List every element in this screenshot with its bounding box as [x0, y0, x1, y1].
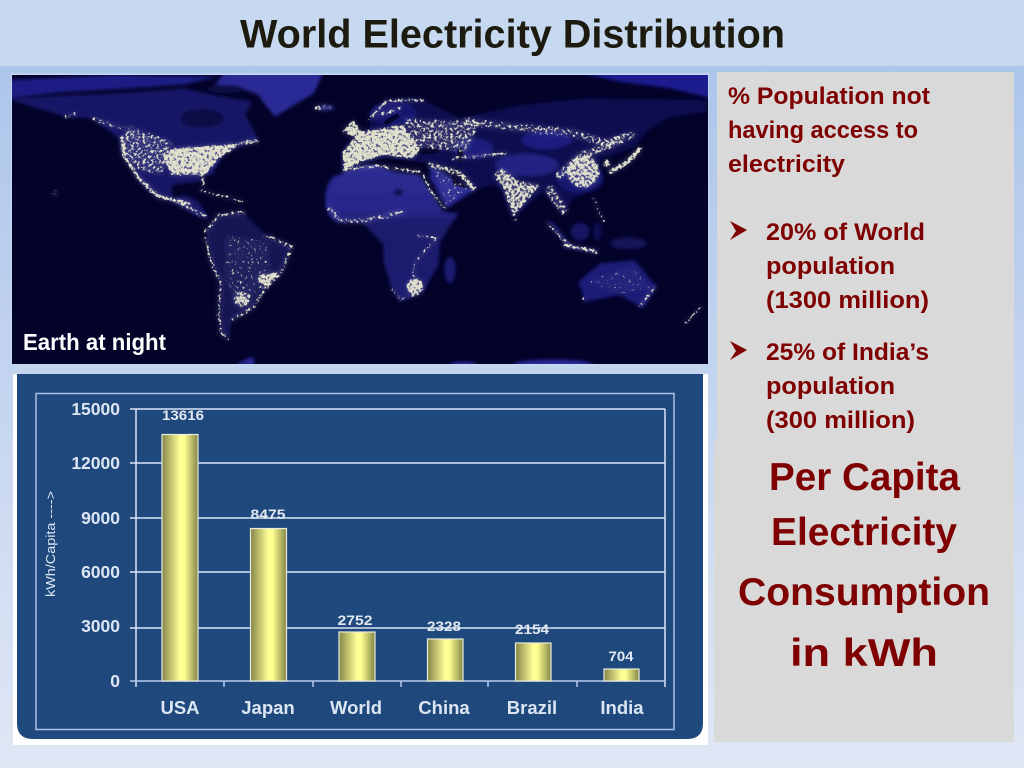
panel: earth at night map	[9, 72, 712, 369]
heading: population without access: having access to	[728, 117, 918, 144]
bullet: India population: (300 million)	[766, 407, 915, 434]
bullet: world population: (1300 million)	[766, 287, 929, 314]
gridlines and axes	[130, 409, 665, 687]
y axis labels	[71, 399, 120, 691]
heading: population without access: % Population not	[728, 83, 930, 110]
value labels: 2752	[338, 613, 372, 628]
bullet: India population: population	[766, 373, 895, 400]
y axis labels: 12000	[71, 453, 120, 473]
category labels: China	[418, 697, 470, 718]
heading: population without access: electricity	[728, 151, 845, 178]
category labels: Japan	[241, 697, 295, 718]
category labels	[160, 697, 644, 718]
category labels: India	[600, 697, 644, 718]
panel: access to electricity text	[717, 72, 1014, 444]
panel: per capita heading: Electricity	[771, 511, 957, 554]
category labels: USA	[160, 697, 200, 718]
y axis labels: 9000	[81, 508, 120, 528]
panel: per capita heading: in kWh	[790, 632, 938, 675]
bullet: world population: population	[766, 253, 895, 280]
map: Europe, Africa, Asia, Australia	[319, 72, 712, 369]
y axis labels: 15000	[71, 399, 120, 419]
bullet: India population: 25% of India’s	[766, 339, 929, 366]
y axis labels: 6000	[81, 562, 120, 582]
value labels: 2154	[515, 622, 550, 637]
heading: population without access	[728, 83, 930, 178]
header band	[0, 0, 1024, 66]
category labels: Brazil	[507, 697, 557, 718]
y axis labels: 0	[110, 671, 120, 691]
bars	[162, 434, 639, 681]
map: inland seas	[363, 113, 475, 190]
panel: per capita heading: Consumption	[738, 571, 990, 614]
value labels: 8475	[250, 507, 286, 522]
bullet: world population: 20% of World	[766, 219, 925, 246]
y axis title: kWh/Capita ---->	[43, 491, 58, 597]
category labels: World	[330, 697, 382, 718]
value labels	[162, 408, 634, 664]
panel: bar chart	[13, 374, 708, 745]
bullet: world population	[730, 219, 929, 314]
value labels: 2328	[427, 619, 462, 634]
panel: per capita heading: Per Capita	[769, 456, 960, 499]
bullet: India population	[730, 339, 929, 434]
map caption: Earth at night	[23, 329, 166, 355]
value labels: 704	[608, 649, 634, 664]
map: Americas	[9, 72, 352, 365]
y axis labels: 3000	[81, 616, 120, 636]
title: World Electricity Distribution	[240, 12, 785, 56]
value labels: 13616	[162, 408, 205, 423]
panel: per capita heading	[714, 441, 1014, 742]
